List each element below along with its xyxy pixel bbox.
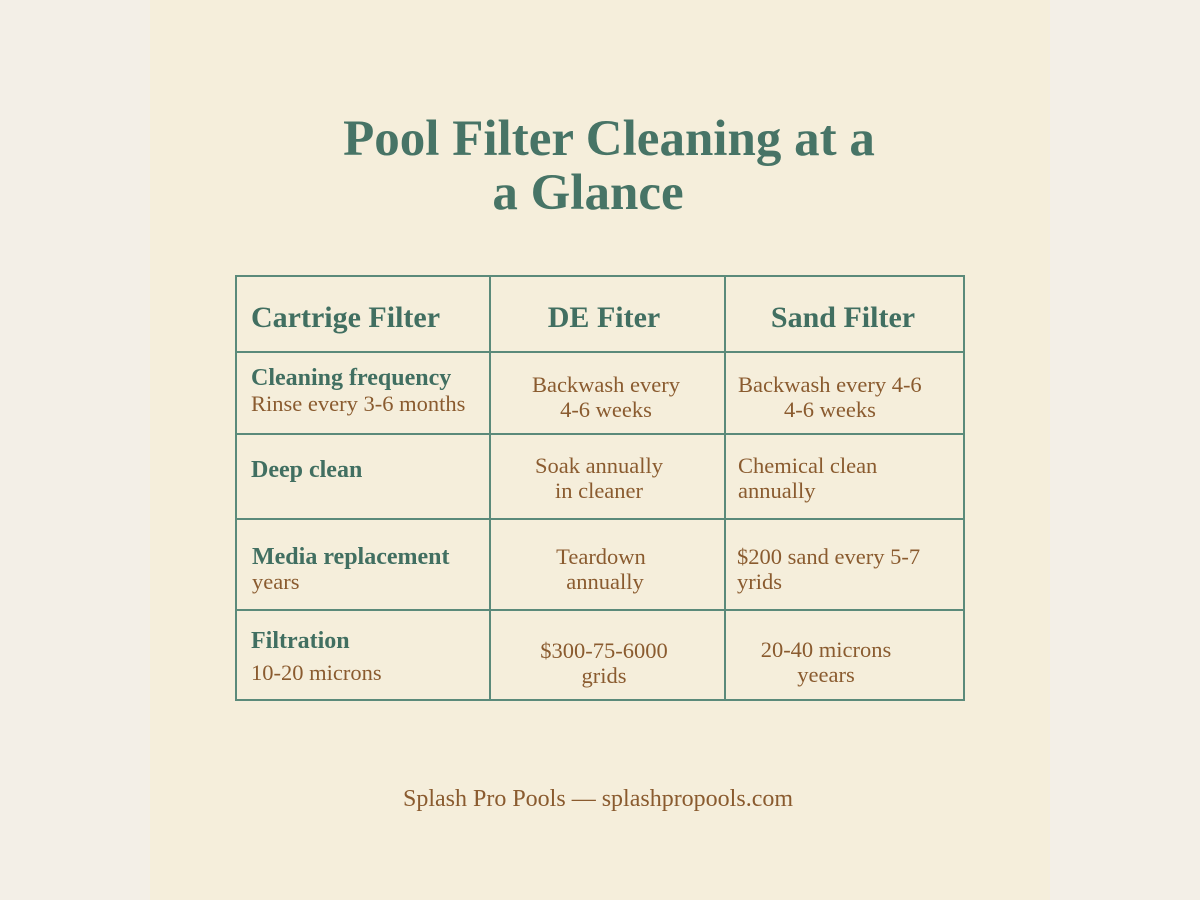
text: Rinse every 3-6 months xyxy=(251,391,465,416)
text: Filtration xyxy=(251,628,350,654)
title: a Glance xyxy=(492,165,684,221)
text: Sand Filter xyxy=(771,301,915,334)
text: years xyxy=(252,569,299,594)
text: 10-20 microns xyxy=(251,660,382,685)
text: Media replacement xyxy=(252,544,450,570)
text: yeears xyxy=(797,662,855,687)
background panel xyxy=(150,0,1050,900)
text: Teardown xyxy=(556,544,646,569)
text: 4-6 weeks xyxy=(560,397,652,422)
text: yrids xyxy=(737,569,782,594)
text: $300-75-6000 xyxy=(540,638,668,663)
row: deep clean xyxy=(251,453,877,503)
text: annually xyxy=(738,478,815,503)
text: Cartrige Filter xyxy=(251,301,440,334)
text: Deep clean xyxy=(251,457,362,483)
text: $200 sand every 5-7 xyxy=(737,544,920,569)
title xyxy=(343,111,875,221)
text: Cleaning frequency xyxy=(251,365,451,391)
text: 4-6 weeks xyxy=(784,397,876,422)
text: 20-40 microns xyxy=(761,637,891,662)
text: annually xyxy=(566,569,644,594)
table xyxy=(235,275,965,701)
text: Backwash every xyxy=(532,372,680,397)
text: Chemical clean xyxy=(738,453,877,478)
text: grids xyxy=(582,663,626,688)
row: media replacement xyxy=(252,544,920,594)
title: Pool Filter Cleaning at a xyxy=(343,111,875,167)
footer: Splash Pro Pools — splashpropools.com xyxy=(403,786,793,812)
row: cleaning frequency xyxy=(251,365,922,422)
text: Soak annually xyxy=(535,453,663,478)
header row xyxy=(251,301,915,334)
row: filtration xyxy=(251,628,891,688)
text: DE Fiter xyxy=(548,301,660,334)
text: in cleaner xyxy=(555,478,643,503)
text: Backwash every 4-6 xyxy=(738,372,922,397)
